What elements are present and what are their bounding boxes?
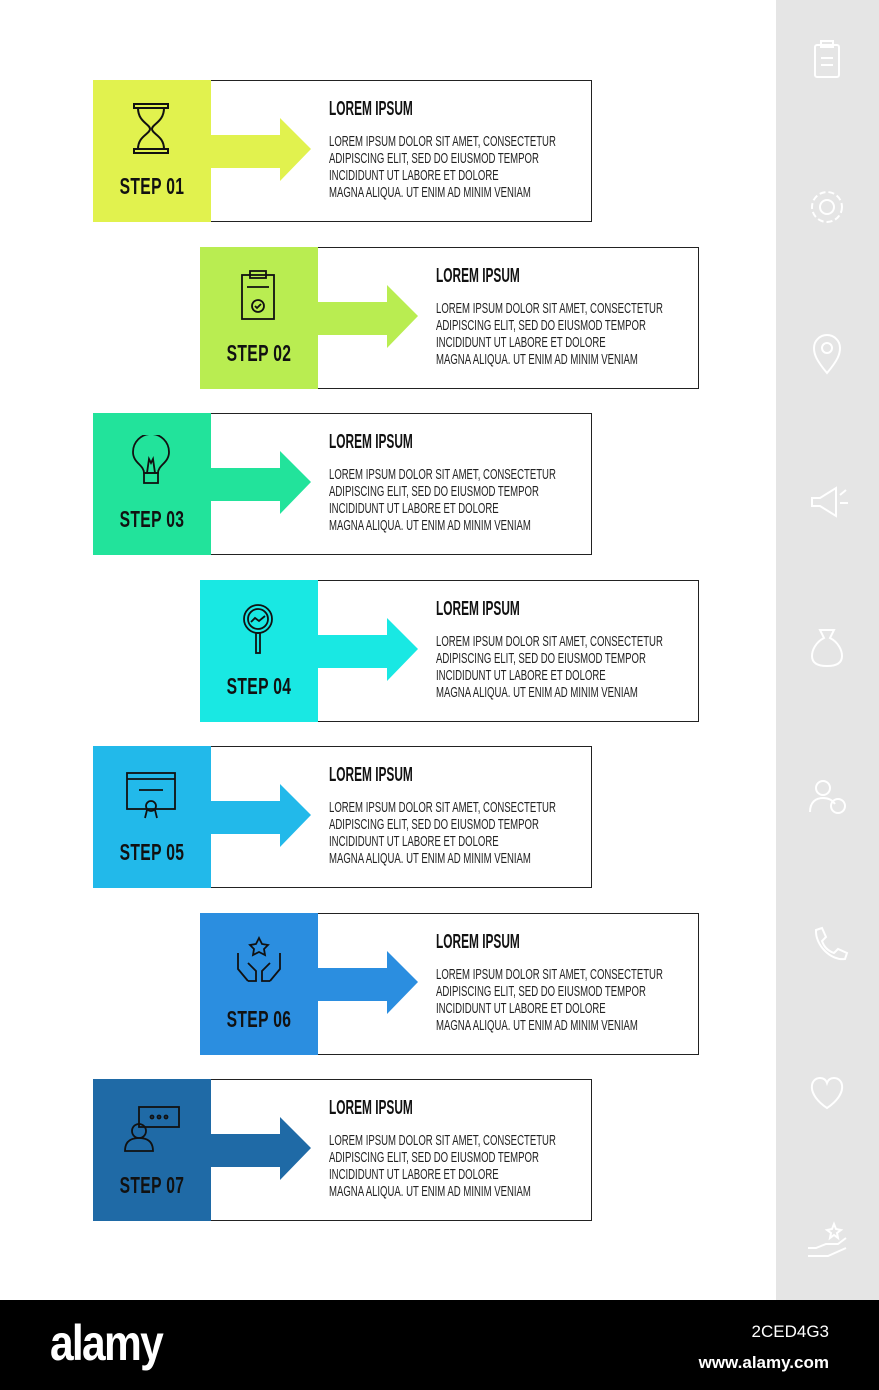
- label: STEP 07: [120, 1172, 184, 1198]
- icon: hand star: [808, 1224, 846, 1256]
- text: INCIDIDUNT UT LABORE ET DOLORE: [436, 668, 606, 684]
- text: ADIPISCING ELIT, SED DO EIUSMOD TEMPOR: [436, 984, 646, 1000]
- text: LOREM IPSUM DOLOR SIT AMET, CONSECTETUR: [329, 1133, 556, 1149]
- label: STEP 04: [227, 673, 291, 699]
- text: LOREM IPSUM: [329, 98, 413, 120]
- icon: user chat: [124, 1106, 180, 1152]
- text: LOREM IPSUM DOLOR SIT AMET, CONSECTETUR: [436, 634, 663, 650]
- url: www.alamy.com: [699, 1353, 829, 1372]
- icon: bulb: [132, 435, 170, 484]
- text: INCIDIDUNT UT LABORE ET DOLORE: [329, 1167, 499, 1183]
- icon: bag: [812, 630, 842, 666]
- text: MAGNA ALIQUA. UT ENIM AD MINIM VENIAM: [329, 851, 531, 867]
- text: [436, 265, 663, 368]
- color block: [93, 1079, 211, 1221]
- text: ADIPISCING ELIT, SED DO EIUSMOD TEMPOR: [436, 651, 646, 667]
- text: ADIPISCING ELIT, SED DO EIUSMOD TEMPOR: [329, 1150, 539, 1166]
- text: LOREM IPSUM: [436, 598, 520, 620]
- text: INCIDIDUNT UT LABORE ET DOLORE: [329, 834, 499, 850]
- icon: clipboard: [815, 41, 839, 77]
- color block: [200, 580, 318, 722]
- text: INCIDIDUNT UT LABORE ET DOLORE: [436, 335, 606, 351]
- text: LOREM IPSUM DOLOR SIT AMET, CONSECTETUR: [329, 134, 556, 150]
- color block: [93, 413, 211, 555]
- step 05: [93, 746, 592, 888]
- label: STEP 05: [120, 839, 184, 865]
- image id: 2CED4G3: [752, 1322, 829, 1341]
- icon: pin: [814, 335, 840, 373]
- text: LOREM IPSUM: [329, 764, 413, 786]
- label: STEP 01: [120, 173, 184, 199]
- icon: hourglass: [133, 103, 169, 154]
- text: LOREM IPSUM DOLOR SIT AMET, CONSECTETUR: [329, 800, 556, 816]
- footer: [0, 1300, 879, 1390]
- text: LOREM IPSUM DOLOR SIT AMET, CONSECTETUR: [436, 301, 663, 317]
- icon: user check: [810, 781, 845, 813]
- text: INCIDIDUNT UT LABORE ET DOLORE: [436, 1001, 606, 1017]
- icon: heart: [812, 1078, 842, 1108]
- text: INCIDIDUNT UT LABORE ET DOLORE: [329, 501, 499, 517]
- icon: magnifier: [243, 604, 273, 654]
- text: ADIPISCING ELIT, SED DO EIUSMOD TEMPOR: [436, 318, 646, 334]
- label: STEP 03: [120, 506, 184, 532]
- step 06: [200, 913, 699, 1055]
- text: LOREM IPSUM: [436, 931, 520, 953]
- text: [329, 1097, 556, 1200]
- text: [436, 931, 663, 1034]
- step 07: [93, 1079, 592, 1221]
- icon: phone: [816, 928, 847, 959]
- label: STEP 02: [227, 340, 291, 366]
- text: [436, 598, 663, 701]
- color block: [200, 247, 318, 389]
- text: LOREM IPSUM: [329, 431, 413, 453]
- text: ADIPISCING ELIT, SED DO EIUSMOD TEMPOR: [329, 484, 539, 500]
- arrow: [211, 784, 311, 847]
- icon: certificate: [126, 772, 176, 818]
- step 03: [93, 413, 592, 555]
- text: MAGNA ALIQUA. UT ENIM AD MINIM VENIAM: [329, 1184, 531, 1200]
- text: LOREM IPSUM: [436, 265, 520, 287]
- icon: clipboard check: [241, 270, 275, 320]
- arrow: [318, 951, 418, 1014]
- text: [329, 98, 556, 201]
- text: ADIPISCING ELIT, SED DO EIUSMOD TEMPOR: [329, 151, 539, 167]
- label: STEP 06: [227, 1006, 291, 1032]
- text: MAGNA ALIQUA. UT ENIM AD MINIM VENIAM: [436, 352, 638, 368]
- text: MAGNA ALIQUA. UT ENIM AD MINIM VENIAM: [436, 685, 638, 701]
- arrow: [211, 118, 311, 181]
- text: INCIDIDUNT UT LABORE ET DOLORE: [329, 168, 499, 184]
- text: ADIPISCING ELIT, SED DO EIUSMOD TEMPOR: [329, 817, 539, 833]
- logo: alamy: [50, 1315, 162, 1371]
- icon: megaphone: [812, 488, 848, 516]
- arrow: [318, 285, 418, 348]
- arrow: [211, 1117, 311, 1180]
- text: MAGNA ALIQUA. UT ENIM AD MINIM VENIAM: [329, 185, 531, 201]
- text: LOREM IPSUM DOLOR SIT AMET, CONSECTETUR: [436, 967, 663, 983]
- color block: [93, 746, 211, 888]
- step 02: [200, 247, 699, 389]
- step 01: [93, 80, 592, 222]
- icon: hands star: [237, 936, 281, 982]
- text: LOREM IPSUM: [329, 1097, 413, 1119]
- text: LOREM IPSUM DOLOR SIT AMET, CONSECTETUR: [329, 467, 556, 483]
- icon: gear: [812, 192, 842, 222]
- arrow: [211, 451, 311, 514]
- step 04: [200, 580, 699, 722]
- sidebar: [776, 0, 879, 1300]
- arrow: [318, 618, 418, 681]
- text: [329, 431, 556, 534]
- color block: [200, 913, 318, 1055]
- color block: [93, 80, 211, 222]
- text: [329, 764, 556, 867]
- text: MAGNA ALIQUA. UT ENIM AD MINIM VENIAM: [436, 1018, 638, 1034]
- text: MAGNA ALIQUA. UT ENIM AD MINIM VENIAM: [329, 518, 531, 534]
